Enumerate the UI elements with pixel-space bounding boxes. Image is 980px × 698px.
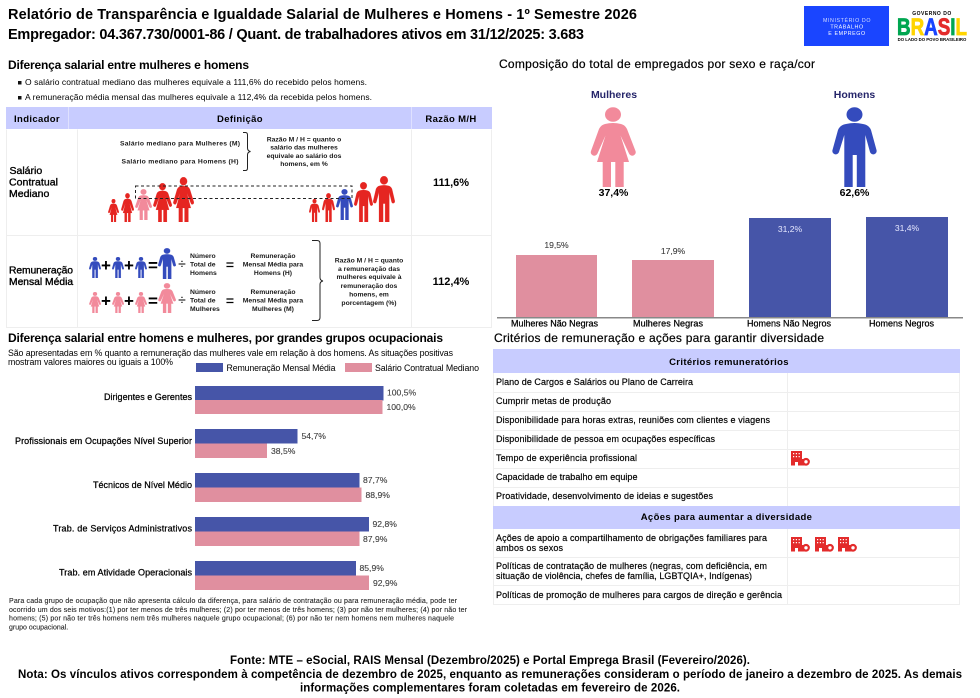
formula: homens: ÷: [178, 256, 186, 272]
group: Profissionais: [15, 429, 326, 458]
legend: Remuneração Mensal Média: [226, 363, 336, 373]
formula: homens: Número: [190, 253, 216, 260]
formula: homens: +: [101, 256, 111, 275]
row label: Salário Contratual Mediano: [9, 165, 58, 200]
group: Dirigentes e Gerentes: 100,5%: [387, 388, 417, 398]
title: Empregador: 04.367.730/0001-86 / Quant. de trabalhadores ativos em 31/12/2025: 3.683: [8, 27, 584, 43]
icons: empresas com selo: [791, 537, 856, 552]
bar chart: grupos ocupacionais: [15, 386, 417, 590]
definition: remuneração: homens, em: [349, 292, 389, 298]
table header: critérios remuneratórios: Critérios remuneratórios: [669, 357, 789, 368]
footnote: grupo ocupacional.: [9, 624, 68, 632]
icon: empresa com selo: [791, 451, 809, 466]
heading: composição: Composição do total de empregados por sexo e raça/cor: [499, 57, 815, 71]
pictogram: mulheres: 37,4%: [599, 187, 629, 199]
salary definition text: [120, 136, 342, 168]
bar chart: sexo e raça/cor: [497, 217, 963, 328]
formula: homens: =: [148, 256, 158, 275]
action rows: ambos os sexos: [496, 543, 564, 553]
footer: fonte e nota: [18, 655, 962, 694]
formula: mulheres: +: [124, 292, 134, 310]
action rows: Políticas de contratação de mulheres (negras, com deficiência, em: [496, 561, 767, 571]
criteria rows: Tempo de experiência profissional: [496, 453, 637, 463]
group: Atividade Operacional: [59, 561, 398, 590]
group: Profissionais: Profissionais em Ocupações Nível Superior: [15, 436, 192, 446]
bar chart: sexo e raça/cor: 17,9%: [661, 246, 686, 256]
table header: Indicador: [14, 114, 60, 125]
formula: mulheres: Mensal Média para: [243, 298, 303, 304]
definition: remuneração: a remuneração das: [338, 266, 400, 273]
row label: Remuneração Mensal Média: [9, 266, 73, 288]
legend: [196, 363, 479, 373]
group: Atividade Operacional: 92,9%: [373, 578, 398, 588]
ratio: remuneração: 112,4%: [433, 276, 470, 288]
group: Profissionais: 38,5%: [271, 446, 296, 456]
row label: Remuneração Mensal Média: Remuneração: [9, 266, 73, 276]
group: Serviços Administrativos: 87,9%: [363, 534, 388, 544]
group: Serviços Administrativos: [53, 517, 397, 546]
group: Dirigentes e Gerentes: Dirigentes e Gerentes: [104, 392, 192, 402]
pictogram: homens: 62,6%: [840, 187, 870, 199]
logo: Ministério do Trabalho e Emprego: [804, 6, 889, 46]
formula: mulheres: =: [226, 292, 234, 308]
bullets: [18, 77, 372, 102]
formula: homens: +: [124, 256, 134, 275]
logo: Governo do Brasil: DO LADO DO POVO BRASILEIRO: [898, 37, 967, 42]
logo: Ministério do Trabalho e Emprego: TRABALHO: [830, 24, 864, 30]
panel: critérios de remuneração e ações: [493, 331, 960, 604]
bar chart: sexo e raça/cor: 31,4%: [895, 223, 920, 233]
pictogram: homens: [832, 89, 877, 199]
row label: Remuneração Mensal Média: Mensal Média: [9, 277, 73, 288]
criteria rows: Plano de Cargos e Salários ou Plano de Carreira: [496, 377, 693, 387]
formula: homens: Total de: [190, 262, 216, 268]
bar chart: sexo e raça/cor: 31,2%: [778, 224, 803, 234]
dashed median box: [136, 186, 352, 198]
description: São apresentadas em % quanto a remuneração das mulheres vale em relação à dos homens. As situações positivas: [8, 348, 454, 358]
footer: fonte e nota: informações complementares foram coletadas em fevereiro de 2026.: [300, 682, 680, 694]
formula: mulheres: Mulheres: [190, 306, 220, 313]
formula: mulheres: +: [101, 292, 111, 310]
description: mostram valores maiores ou iguais a 100%: [8, 357, 173, 367]
panel: composição do total de empregados: [497, 57, 963, 328]
definition: remuneração: Razão M / H = quanto: [335, 258, 403, 264]
formula: homens: =: [226, 256, 234, 272]
action rows: [496, 533, 782, 600]
pictogram: mulheres: Mulheres: [591, 89, 637, 101]
bar chart: sexo e raça/cor: Homens Não Negros: [747, 318, 832, 328]
footer: fonte e nota: Fonte: MTE – eSocial, RAIS Mensal (Dezembro/2025) e Portal Emprega Brasil (Fevereiro/2026).: [230, 655, 750, 667]
bar chart: sexo e raça/cor: Mulheres Não Negras: [511, 318, 598, 328]
definition: remuneração: [335, 258, 403, 307]
legend: Salário Contratual Mediano: [375, 363, 479, 373]
salary definition text: Salário mediano para Mulheres (M): [120, 140, 240, 148]
row label: Salário Contratual Mediano: Mediano: [9, 188, 49, 200]
action rows: situação de violência, chefes de família, LGBTQIA+, Indígenas): [496, 571, 752, 581]
table header: Definição: [217, 114, 263, 125]
ratio: salário: 111,6%: [433, 177, 469, 189]
heading: diferença salarial: Diferença salarial entre mulheres e homens: [8, 58, 249, 72]
group: Profissionais: 54,7%: [302, 431, 326, 441]
pictogram: homens: Homens: [834, 89, 875, 101]
logo: Governo do Brasil: GOVERNO DO: [912, 11, 952, 17]
formula: mulheres: Remuneração: [251, 289, 295, 296]
formula: homens: Mensal Média para: [243, 262, 303, 268]
definition: remuneração: mulheres equivale à: [337, 274, 402, 281]
footnote: homens; (5) por não ter três homens nem três mulheres naquele grupo ocupacional; (6) por não ter nem homens nem mulheres naquele: [9, 616, 454, 622]
title: Relatório de Transparência e Igualdade Salarial de Mulheres e Homens - 1º Semestre 2026: [8, 7, 637, 23]
formula: mulheres: Número: [190, 289, 216, 296]
action rows: Ações de apoio a compartilhamento de obrigações familiares para: [496, 533, 767, 543]
pictogram: mulheres: [591, 89, 637, 199]
group: Técnicos: [93, 473, 390, 502]
footer: fonte e nota: Nota: Os vínculos ativos correspondem à competência de dezembro de 2025, enquanto as remunerações consideram o período de janeiro a dezembro de 2025. As demais: [18, 669, 962, 681]
brace: [312, 240, 323, 320]
footnote: [9, 598, 468, 632]
table header: [6, 107, 492, 129]
formula: homens: Homens: [190, 270, 217, 277]
salary definition text: Salário mediano para Homens (H): [122, 158, 238, 166]
formula: mulheres: =: [148, 292, 158, 310]
criteria rows: Capacidade de trabalho em equipe: [496, 472, 638, 482]
group: Atividade Operacional: Trab. em Atividade Operacionais: [59, 568, 192, 578]
table header: ações: Ações para aumentar a diversidade: [641, 512, 812, 523]
bullets: A remuneração média mensal das mulheres equivale a 112,4% da recebida pelos homens.: [25, 92, 372, 102]
salary definition text: equivale ao salário dos: [267, 153, 342, 160]
title: [8, 7, 637, 43]
logo: Ministério do Trabalho e Emprego: MINISTÉRIO DO: [823, 17, 871, 24]
criteria rows: [496, 377, 770, 501]
criteria rows: Disponibilidade para horas extras, reuniões com clientes e viagens: [496, 415, 770, 425]
bar chart: sexo e raça/cor: 19,5%: [544, 240, 569, 250]
footnote: ocorrido um dos seis motivos:(1) por ter menos de três mulheres; (2) por ter menos de três homens; (3) por não ter mulheres; (4) por não ter: [9, 607, 468, 614]
description: [8, 348, 454, 367]
group: Serviços Administrativos: 92,8%: [372, 519, 397, 529]
definition: remuneração: remuneração dos: [341, 283, 398, 290]
group: Técnicos: 87,7%: [363, 475, 388, 485]
figures: women median: [108, 177, 194, 222]
group: Dirigentes e Gerentes: 100,0%: [386, 402, 416, 412]
bar chart: sexo e raça/cor: Mulheres Negras: [633, 318, 704, 328]
table header: ações: [493, 506, 960, 529]
group: Dirigentes e Gerentes: [104, 386, 417, 414]
group: Técnicos: Técnicos de Nível Médio: [93, 480, 192, 490]
panel: diferença salarial entre mulheres e homens: [6, 58, 492, 328]
group: Atividade Operacional: 85,9%: [360, 563, 384, 573]
salary definition text: salário das mulheres: [270, 144, 338, 152]
formula: mulheres: Mulheres (M): [252, 306, 294, 313]
heading: critérios: Critérios de remuneração e ações para garantir diversidade: [494, 331, 824, 345]
logo: Ministério do Trabalho e Emprego: E EMPREGO: [828, 31, 866, 37]
formula: homens: Homens (H): [254, 270, 292, 277]
row label: Salário Contratual Mediano: Contratual: [9, 176, 58, 188]
salary definition text: Razão M / H = quanto o: [267, 136, 341, 144]
bullets: O salário contratual mediano das mulheres equivale a 111,6% do recebido pelos homens.: [25, 77, 367, 87]
action rows: Políticas de promoção de mulheres para cargos de direção e gerência: [496, 590, 782, 600]
table header: critérios remuneratórios: [493, 349, 960, 373]
criteria rows: Disponibilidade de pessoa em ocupações específicas: [496, 434, 716, 444]
panel: diferença por grandes grupos ocupacionais: [8, 331, 479, 632]
group: Serviços Administrativos: Trab. de Serviços Administrativos: [53, 524, 192, 534]
formula: mulheres: ÷: [178, 292, 186, 308]
criteria rows: Cumprir metas de produção: [496, 396, 611, 406]
formula: homens: [89, 248, 303, 279]
salary definition text: homens, em %: [280, 161, 328, 168]
heading: grupos ocupacionais: Diferença salarial entre homens e mulheres, por grandes grupos ocupacionais: [8, 331, 443, 345]
formula: homens: Remuneração: [251, 253, 295, 260]
formula: mulheres: [89, 283, 303, 313]
criteria rows: Proatividade, desenvolvimento de ideias e sugestões: [496, 491, 714, 501]
logo: Governo do Brasil: BRASIL: [897, 15, 967, 41]
bar chart: sexo e raça/cor: Homens Negros: [869, 318, 934, 328]
figures: men median: [309, 176, 395, 222]
definition: remuneração: porcentagem (%): [341, 300, 397, 307]
footnote: Para cada grupo de ocupação que não apresenta cálculo da diferença, para salário de contratação ou para remuneração média, pode ter: [9, 598, 458, 605]
table header: Razão M/H: [425, 114, 477, 125]
group: Técnicos: 88,9%: [366, 490, 390, 500]
row label: Salário Contratual Mediano: Salário: [10, 165, 42, 177]
formula: mulheres: Total de: [190, 298, 216, 304]
brace: [243, 132, 250, 170]
